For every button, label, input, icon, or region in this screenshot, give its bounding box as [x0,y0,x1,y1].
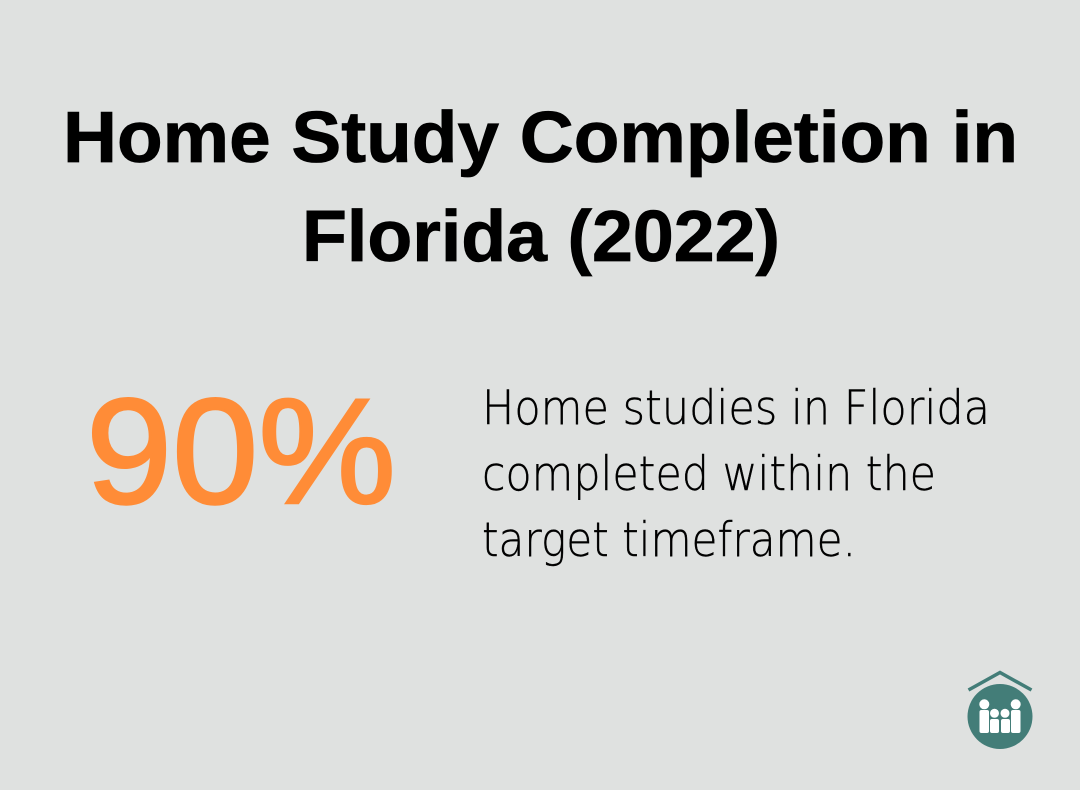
description text: completed within the [482,447,936,502]
title: Home Study Completion in [63,98,1018,178]
description text: target timeframe. [482,513,856,568]
description text [482,381,990,568]
title: Florida (2022) [302,197,780,277]
description text: Home studies in Florida [482,381,990,436]
statistic: 90%: 90% [86,367,396,535]
icon: house and family logo [968,672,1032,749]
title [63,98,1018,277]
